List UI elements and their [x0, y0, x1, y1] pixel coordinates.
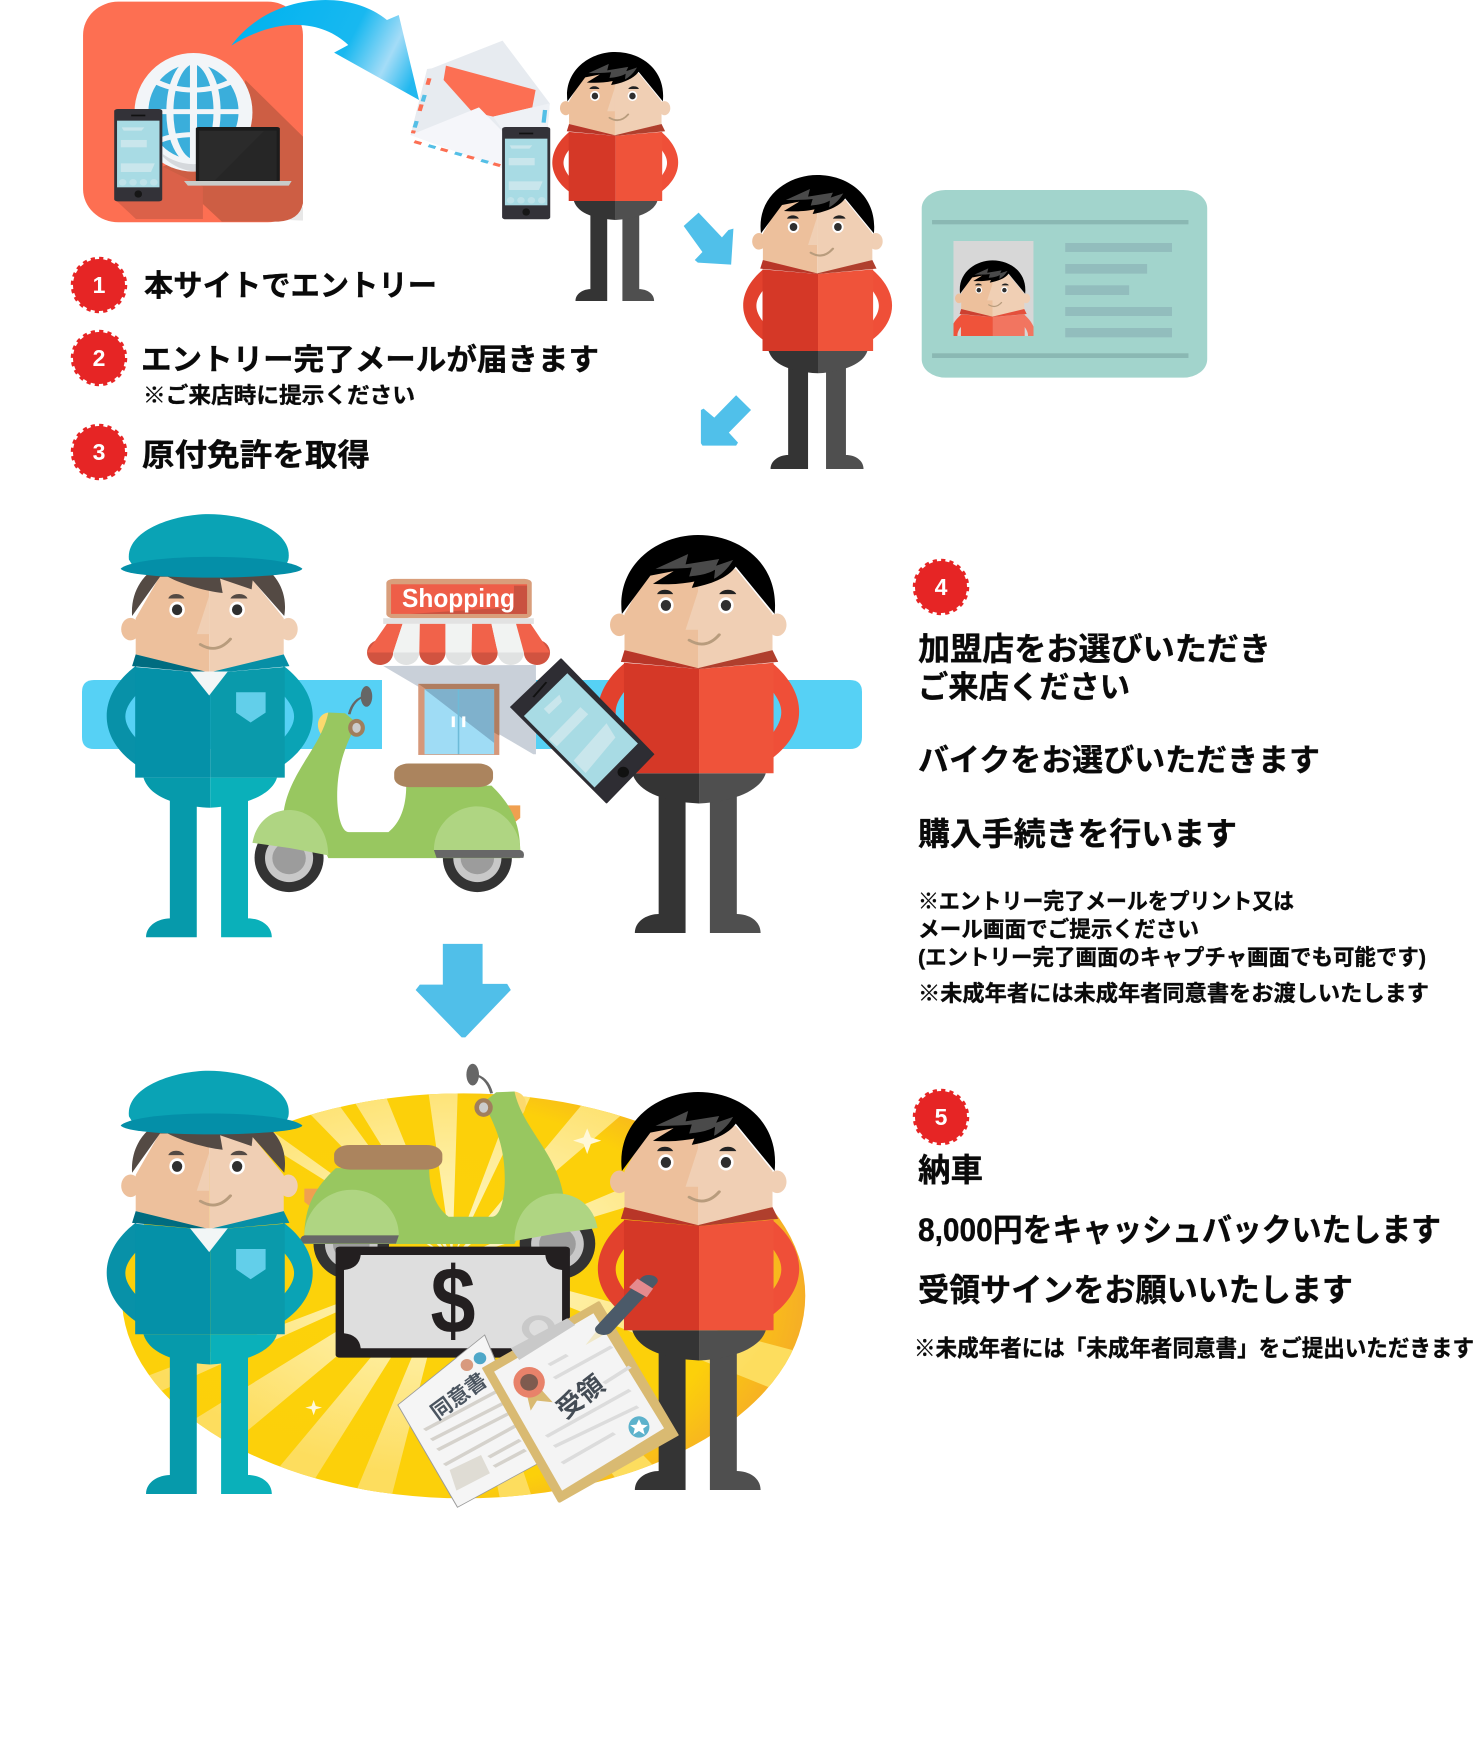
icon: green scooter	[252, 686, 524, 892]
step 4 badge	[914, 560, 968, 614]
icon: shopping store: Shopping	[402, 583, 515, 613]
step 5 text block: 受領サインをお願いいたします	[918, 1272, 1353, 1308]
step 5 badge	[914, 1090, 968, 1144]
step 5 text block: 8,000円をキャッシュバックいたします	[918, 1212, 1441, 1248]
step 4 notes: ※未成年者には未成年者同意書をお渡しいたします	[918, 981, 1429, 1006]
icon: green scooter delivered	[300, 1064, 598, 1280]
step 1 text: 本サイトでエントリー	[144, 270, 437, 303]
step 4 notes: (エントリー完了画面のキャプチャ画面でも可能です)	[918, 945, 1426, 970]
step 5 text block	[918, 1152, 1441, 1308]
document: receipt clipboard	[484, 1302, 677, 1502]
icon: orange app tile with globe and devices	[83, 2, 303, 222]
icon: moped license card	[922, 190, 1207, 378]
yellow sunburst ellipse	[122, 1093, 806, 1498]
step 2 note: ※ご来店時に提示ください	[143, 383, 415, 408]
arrow: curved blue arrow from site to mail	[231, 0, 419, 100]
icon: cash banknote	[336, 1247, 570, 1358]
step 4 notes: メール画面でご提示ください	[918, 917, 1199, 942]
step 3 badge	[72, 426, 126, 478]
step 5 badge: 5	[935, 1104, 948, 1130]
icon: tablet in customer hand	[511, 659, 654, 803]
step 2 badge: 2	[93, 345, 105, 371]
icon: smartphone held by customer	[502, 127, 550, 219]
step 4 text block: 加盟店をお選びいただき	[918, 631, 1271, 667]
arrow: large down arrow	[416, 944, 511, 1037]
step 3 text: 原付免許を取得	[142, 438, 370, 473]
step 2 text: エントリー完了メールが届きます	[141, 343, 599, 377]
document: receipt clipboard: 受領	[551, 1369, 610, 1425]
icon: airmail envelope with letter	[411, 41, 550, 168]
figure: customer beside license	[743, 175, 892, 469]
document: parental consent form: 同意書	[427, 1369, 491, 1425]
step 4 text block	[918, 631, 1320, 852]
document: parental consent form	[398, 1335, 539, 1507]
step 4 notes: ※エントリー完了メールをプリント又は	[918, 889, 1294, 914]
arrow: down right to license	[684, 213, 733, 265]
step 4 notes	[918, 889, 1429, 1006]
icon: cash banknote: $	[430, 1248, 476, 1354]
step 4 text block: 購入手続きを行います	[918, 816, 1237, 852]
light blue band behind store scene	[82, 680, 862, 749]
step 1 badge: 1	[93, 272, 106, 298]
step 4 text block: バイクをお選びいただきます	[918, 743, 1320, 778]
icon: shopping store	[367, 579, 550, 755]
figure: customer with mail	[552, 52, 678, 301]
icon: signing pen	[586, 1279, 653, 1345]
arrow: down left to next step	[701, 395, 751, 446]
figure: customer at delivery	[598, 1092, 799, 1490]
step 4 badge: 4	[935, 574, 948, 600]
step 3 badge: 3	[93, 439, 105, 465]
step 2 badge	[72, 332, 126, 384]
step 1 badge	[72, 258, 126, 312]
figure: shop staff	[107, 514, 313, 937]
figure: shop staff at delivery	[107, 1071, 313, 1494]
step 4 text block: ご来店ください	[918, 670, 1130, 705]
step 5 text block: 納車	[918, 1152, 983, 1188]
figure: customer at store	[598, 535, 799, 933]
